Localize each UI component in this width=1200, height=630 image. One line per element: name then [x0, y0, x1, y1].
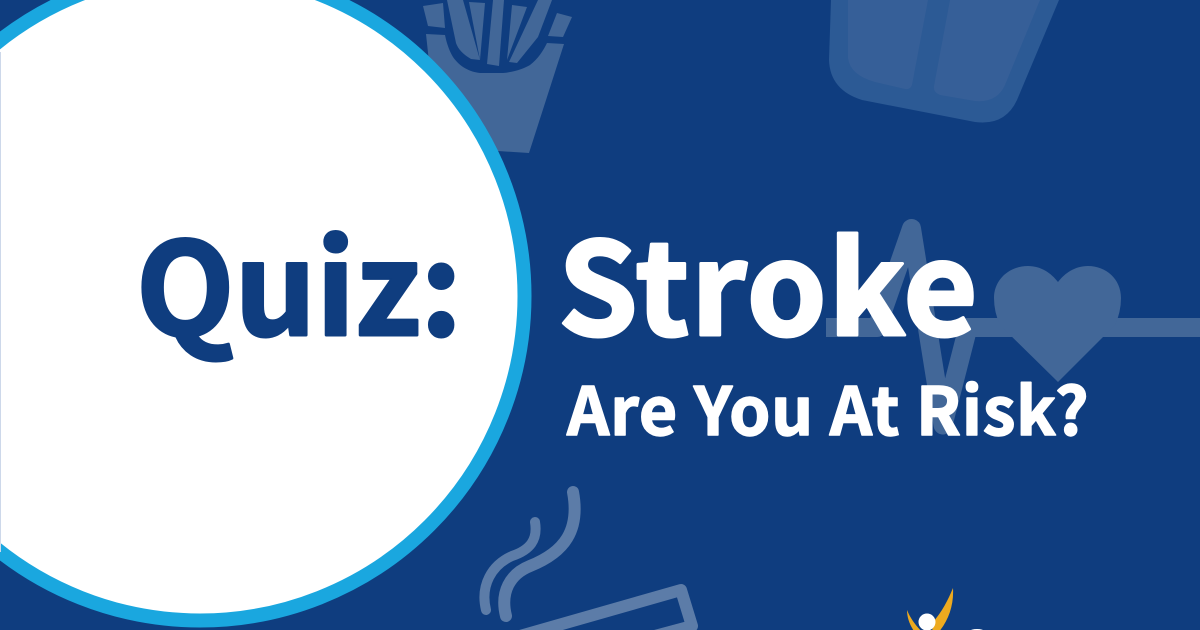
heading: Quiz: Quiz:: [136, 187, 462, 372]
icon: heartbeat line with heart: [826, 228, 1200, 425]
subheading: Are You At Risk: Are You At Risk?: [566, 359, 1090, 455]
white circle with blue ring: [0, 0, 524, 620]
logo: figure with raised arms: [907, 588, 984, 630]
icon: cigarette and smoke: [484, 492, 692, 630]
heading: Stroke: Stroke: [558, 187, 979, 372]
icon: french fries: [423, 0, 572, 153]
left edge strip: [0, 52, 1, 552]
icon: drink cup: [829, 0, 1059, 123]
